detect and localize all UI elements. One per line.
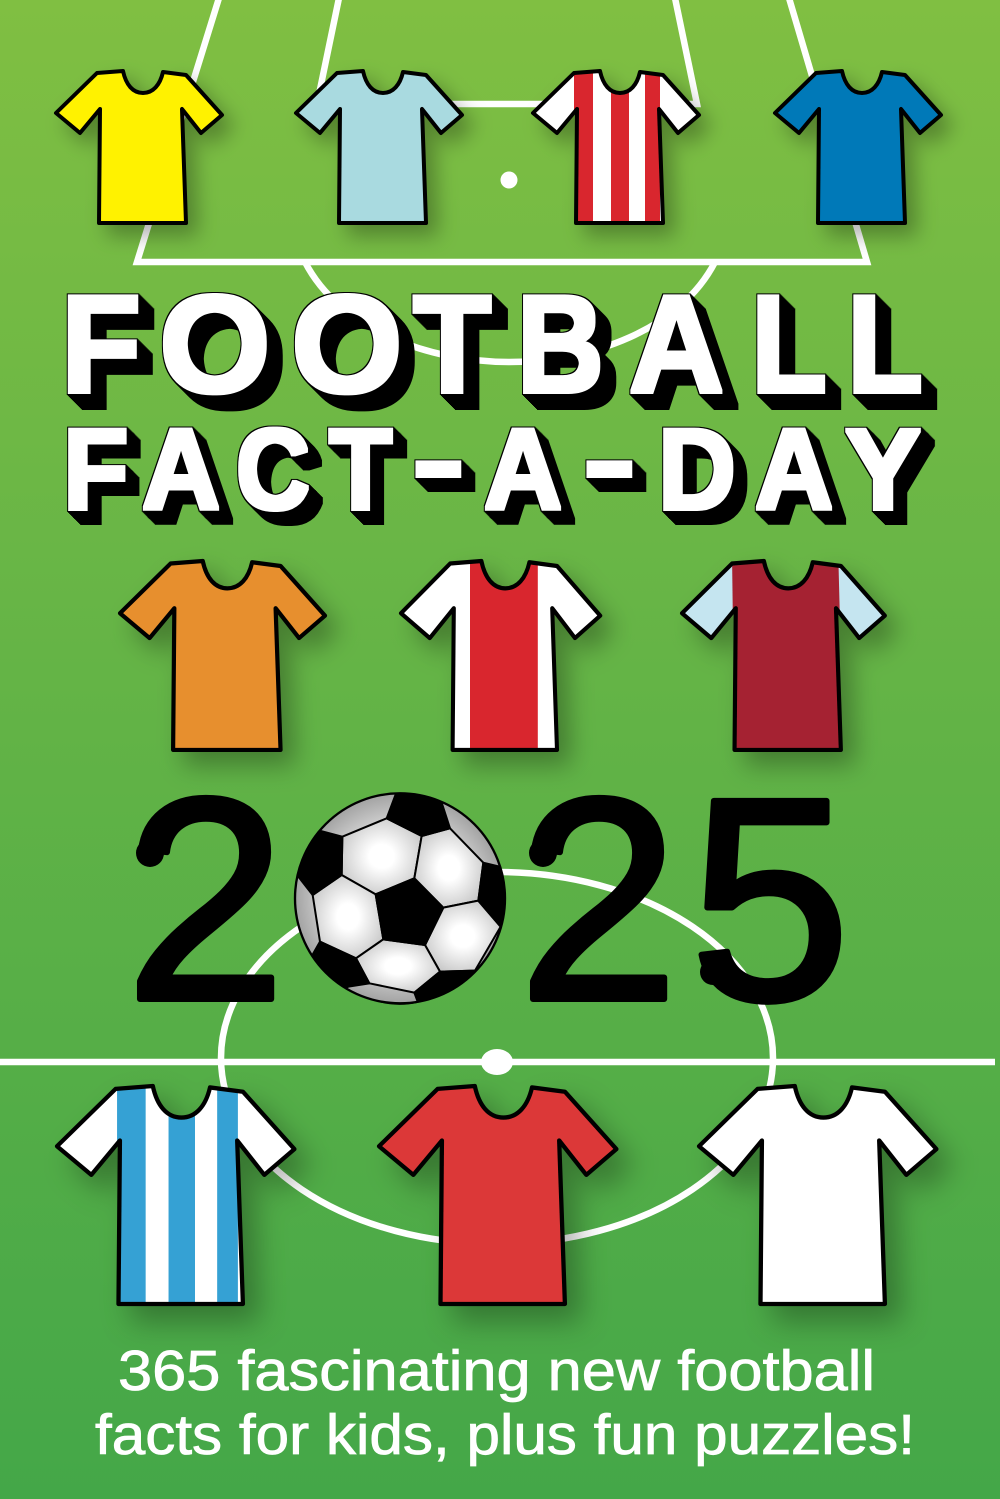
title line 1: FOOTBALL: O <box>159 267 271 422</box>
shirt: claret with sky blue sleeves <box>682 561 885 750</box>
title line 1: FOOTBALL: O <box>291 267 403 422</box>
shirt: orange <box>120 561 325 750</box>
title line 2: FACT-A-DAY: T <box>329 406 392 534</box>
tagline <box>95 1339 915 1467</box>
icon: football replacing the zero <box>290 790 510 1003</box>
shirt: red and white stripes <box>533 71 699 223</box>
shirt: sky blue and white stripes <box>57 1086 294 1304</box>
year: 2025: 2025 <box>126 739 850 1061</box>
title line 1: FOOTBALL: A <box>629 267 724 422</box>
title line 1: FOOTBALL: T <box>413 267 492 422</box>
title line 2: FACT-A-DAY: F <box>63 406 128 534</box>
title line 2: FACT-A-DAY: - <box>411 396 465 524</box>
title line 2: FACT-A-DAY: D <box>658 406 736 534</box>
title line 2: FACT-A-DAY <box>63 396 936 534</box>
title line 2: FACT-A-DAY: A <box>484 406 562 534</box>
title line 1: FOOTBALL: B <box>517 267 604 422</box>
shirt: light blue <box>296 71 462 223</box>
shirt: red with white sides <box>401 561 600 750</box>
title line 1: FOOTBALL: L <box>751 267 827 422</box>
title line 2: FACT-A-DAY: A <box>142 406 220 534</box>
title line 2: FACT-A-DAY: - <box>582 396 636 524</box>
title line 1: FOOTBALL <box>61 267 938 422</box>
title line 2: FACT-A-DAY: A <box>755 406 833 534</box>
title line 1: FOOTBALL: F <box>61 267 141 422</box>
shirt: blue <box>775 71 941 223</box>
title line 2: FACT-A-DAY: C <box>236 406 310 534</box>
tagline: facts for kids, plus fun puzzles! <box>95 1403 915 1467</box>
shirt: yellow <box>56 71 222 223</box>
shirt: white <box>699 1086 936 1304</box>
title line 2: FACT-A-DAY: Y <box>845 406 921 534</box>
tagline: 365 fascinating new football <box>118 1339 875 1403</box>
title line 1: FOOTBALL: L <box>847 267 923 422</box>
shirt: red <box>379 1086 616 1304</box>
